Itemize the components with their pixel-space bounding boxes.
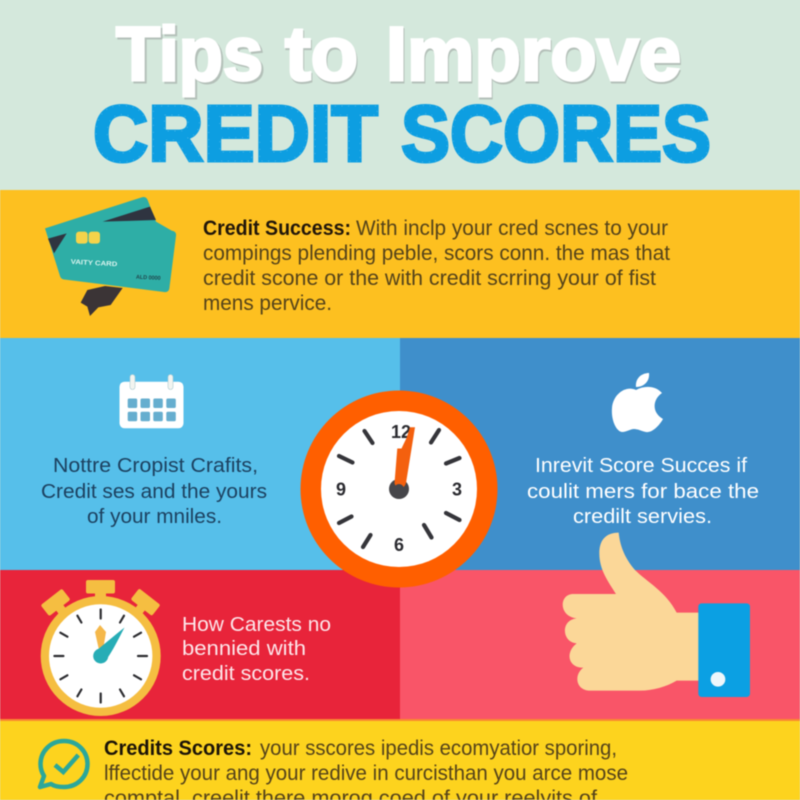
text block: stopwatch tip: How Carests no xyxy=(182,613,331,636)
icon: credit cards: ALD 0000 xyxy=(136,275,161,282)
panel: thumbs up xyxy=(400,533,800,720)
title: Improve xyxy=(387,14,682,99)
text block: calendar tip: of your mniles. xyxy=(87,505,222,528)
text block: credit success: mens pervice. xyxy=(203,292,332,315)
icon: credit cards: VAITY CARD xyxy=(71,259,118,268)
text block: credits scores: Credits Scores: xyxy=(104,737,252,760)
text block: calendar tip xyxy=(41,454,267,528)
icon: chat check xyxy=(40,741,88,787)
title: to xyxy=(285,12,358,97)
text block: credits scores: your sscores ipedis ecomyatior sporing, xyxy=(260,737,617,760)
text block: apple tip: Inrevit Score Succes if xyxy=(535,454,747,477)
text block: calendar tip: Nottre Cropist Crafits, xyxy=(53,454,258,477)
panel: credits scores xyxy=(0,719,800,800)
title: to xyxy=(286,14,359,99)
panel: credit success xyxy=(0,190,800,338)
title: Improve xyxy=(386,12,681,97)
panel: apple tip xyxy=(400,338,800,570)
text block: credit success: Credit Success: xyxy=(203,217,351,240)
text block: credits scores: lffectide your ang your redive in curcisthan you arce mose xyxy=(104,762,628,785)
icon: thumbs up xyxy=(563,533,750,697)
text block: calendar tip: Credit ses and the yours xyxy=(41,480,267,503)
icon: calendar xyxy=(120,374,184,428)
title xyxy=(93,12,711,178)
icon: central clock: 9 xyxy=(336,480,346,500)
title: SCORES xyxy=(401,89,711,178)
icon: apple xyxy=(612,373,663,432)
panel: stopwatch tip xyxy=(0,570,400,720)
icon: credit cards xyxy=(45,197,176,316)
title: Tips xyxy=(118,14,265,99)
text block: apple tip: credilt servies. xyxy=(573,505,712,528)
text block: credit success: With inclp your cred scnes to your xyxy=(356,217,668,240)
text block: apple tip xyxy=(527,454,759,528)
title: Tips xyxy=(116,12,263,97)
panel: calendar tip xyxy=(0,338,400,570)
text block: stopwatch tip xyxy=(182,613,331,685)
icon: central clock: 12 xyxy=(391,422,411,442)
text block: credit success: credit scone or the with credit scrring your of fist xyxy=(203,267,656,290)
text block: credits scores xyxy=(104,737,628,800)
text block: credit success xyxy=(203,217,670,315)
icon: stopwatch xyxy=(41,580,161,716)
title: CREDIT xyxy=(93,89,378,178)
title: CREDIT xyxy=(93,89,378,178)
text block: apple tip: coulit mers for bace the xyxy=(527,480,759,503)
title: SCORES xyxy=(401,89,711,178)
icon: central clock: 6 xyxy=(394,535,404,555)
icon: central clock xyxy=(300,390,498,588)
icon: central clock: 3 xyxy=(452,480,462,500)
text block: stopwatch tip: credit scores. xyxy=(182,662,310,685)
text block: credit success: compings plending peble, scors conn. the mas that xyxy=(203,242,670,265)
text block: stopwatch tip: bennied with xyxy=(182,637,306,660)
